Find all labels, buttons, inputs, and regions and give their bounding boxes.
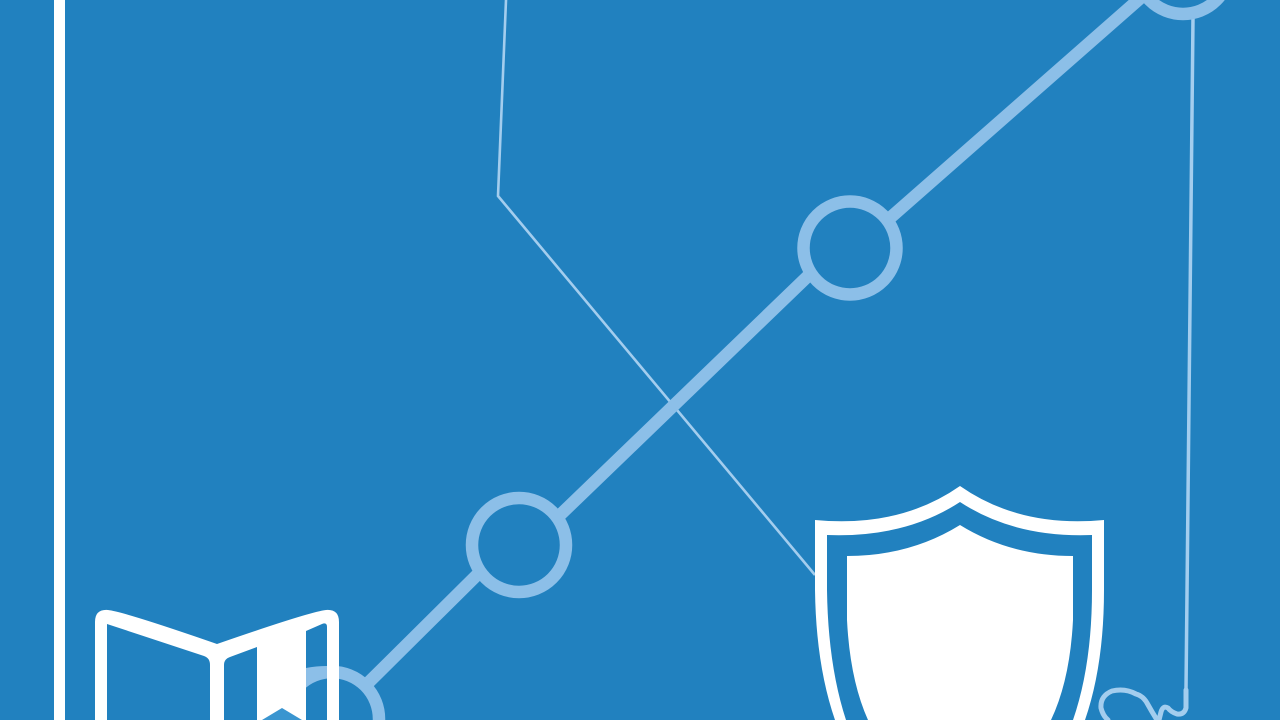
milestone ring middle <box>804 202 896 294</box>
line segments <box>365 0 1145 686</box>
bookmark notch <box>262 708 302 720</box>
milestone ring bottom <box>285 672 379 720</box>
thin angled connector line <box>498 0 815 575</box>
thin right connector line with mouse outline <box>1101 18 1193 720</box>
rising progress line with milestone rings <box>285 0 1230 720</box>
icon: open book with bookmark <box>95 610 339 720</box>
milestone ring top <box>1136 0 1230 14</box>
ring seen through the book's right page <box>306 666 327 681</box>
shield inner solid <box>847 525 1073 720</box>
milestone ring lower <box>472 498 566 592</box>
white vertical frame line <box>54 0 65 720</box>
icon: shield <box>815 486 1104 720</box>
book outline <box>95 610 339 720</box>
icon: mouse outline <box>1101 690 1186 720</box>
shield outer border <box>815 486 1104 720</box>
